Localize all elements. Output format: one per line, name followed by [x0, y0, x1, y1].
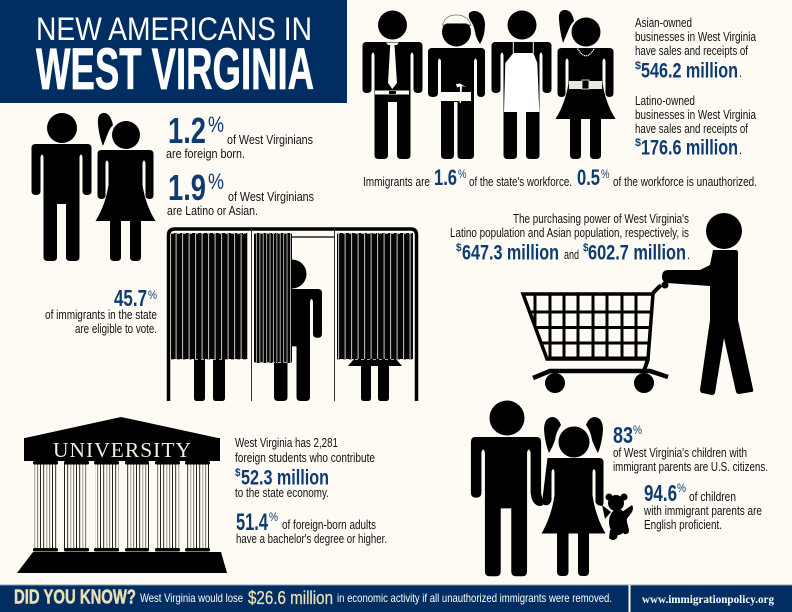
icon: man with apron — [492, 10, 552, 159]
text: Asian-owned businesses: . — [739, 66, 742, 80]
footer bar: did you know: $26.6 million — [248, 588, 333, 608]
text: purchasing power: 602.7 million — [588, 242, 686, 264]
text: workforce shares: 0.5 — [577, 165, 600, 190]
text: English proficient: of children — [689, 490, 736, 504]
icon: university building — [17, 417, 227, 573]
text: Asian-owned businesses: businesses in West Virginia — [635, 30, 756, 44]
text: bachelor's degree: 51.4 — [236, 509, 268, 536]
stat: Latino or Asian: are Latino or Asian. — [167, 204, 258, 218]
text: English proficient: with immigrant parents are — [643, 504, 762, 518]
columns — [33, 461, 210, 552]
text: foreign students: $ — [235, 467, 240, 479]
text: children citizens: of West Virginia's children with — [613, 446, 747, 460]
text: Latino-owned businesses: have sales and receipts of — [635, 122, 748, 136]
text: purchasing power: and — [564, 248, 579, 262]
text: eligible to vote: % — [148, 288, 157, 302]
text: bachelor's degree: of foreign-born adults — [282, 518, 376, 532]
stat: Latino or Asian: 1.9 — [168, 167, 206, 208]
footer bar: did you know: in economic activity if all unauthorized immigrants were removed. — [337, 591, 612, 605]
text: English proficient — [643, 480, 762, 532]
text: workforce shares: Immigrants are — [363, 175, 430, 189]
text: children citizens — [613, 422, 768, 474]
text: workforce shares — [363, 165, 757, 190]
text: Latino-owned businesses: . — [739, 143, 742, 157]
footer bar: did you know: www.immigrationpolicy.org — [642, 594, 774, 606]
icon: man and woman — [32, 113, 156, 261]
text: foreign students — [235, 436, 375, 500]
text: English proficient: English proficient. — [644, 518, 722, 532]
person in the middle booth — [262, 260, 322, 401]
icon: woman with necklace and belt — [556, 10, 616, 159]
title banner: NEW AMERICANS IN — [36, 11, 312, 47]
legs and skirt under the right curtain — [348, 359, 402, 401]
stat: foreign born — [166, 110, 313, 161]
title banner: WEST VIRGINIA — [36, 37, 314, 102]
text: purchasing power: . — [687, 248, 690, 262]
icon: parent and child with teddy bear — [471, 400, 633, 576]
text: workforce shares: % — [601, 167, 610, 181]
text: purchasing power: The purchasing power of West Virginia's — [513, 212, 689, 226]
legs under the left curtain — [194, 355, 225, 401]
stat: Latino or Asian: % — [208, 169, 224, 194]
text: purchasing power: 647.3 million — [462, 242, 559, 264]
footer bar: did you know: West Virginia would lose — [140, 591, 243, 605]
text: eligible to vote: 45.7 — [114, 285, 147, 311]
text: bachelor's degree: have a bachelor's degree or higher. — [236, 532, 387, 546]
text: eligible to vote: of immigrants in the state — [45, 308, 157, 322]
text: foreign students: foreign students who contribute — [235, 451, 375, 465]
text: English proficient: 94.6 — [644, 480, 677, 506]
icon: hammer — [456, 84, 466, 103]
curtain right — [337, 233, 413, 359]
shopper — [662, 213, 753, 395]
text: Latino-owned businesses: $ — [635, 137, 641, 149]
footer bar: did you know — [0, 584, 792, 612]
text: English proficient: % — [677, 481, 686, 495]
stat: foreign born: % — [208, 112, 224, 137]
stat: foreign born: 1.2 — [168, 110, 206, 151]
text: children citizens: 83 — [613, 422, 633, 448]
text: bachelor's degree: % — [269, 510, 278, 524]
icon: worker with hard hat — [428, 11, 485, 159]
title banner — [0, 0, 347, 103]
icon: businessman with tie — [362, 10, 422, 159]
text: workforce shares: 1.6 — [434, 165, 457, 190]
stat: Latino or Asian: of West Virginians — [228, 190, 314, 204]
text: workforce shares: % — [458, 167, 467, 181]
curtain middle — [254, 233, 292, 363]
teddy bear — [602, 494, 633, 540]
text: Asian-owned businesses: 546.2 million — [641, 60, 738, 82]
text: Asian-owned businesses: $ — [635, 60, 641, 72]
text: purchasing power: $ — [583, 242, 588, 254]
text: purchasing power — [450, 212, 690, 264]
text: purchasing power: $ — [456, 242, 462, 254]
text: eligible to vote — [45, 285, 157, 336]
text: Asian-owned businesses: have sales and receipts of — [635, 44, 748, 58]
text: workforce shares: of the state's workforce. — [469, 175, 572, 189]
stat: foreign born: of West Virginians — [227, 133, 313, 147]
icon: university building: UNIVERSITY — [53, 438, 192, 462]
icon: shopper with cart — [523, 213, 753, 395]
text: Asian-owned businesses: Asian-owned — [635, 16, 692, 30]
footer bar: did you know: DID YOU KNOW? — [14, 586, 136, 608]
text: workforce shares: of the workforce is unauthorized. — [613, 175, 757, 189]
curtain left — [171, 233, 248, 359]
icon: voting booths — [168, 229, 416, 401]
text: foreign students: 52.3 million — [241, 466, 329, 490]
shopping cart — [523, 282, 668, 393]
text: foreign students: to the state economy. — [235, 486, 329, 500]
text: purchasing power: Latino population and Asian population, respectively, is — [450, 226, 689, 240]
text: Latino-owned businesses: businesses in West Virginia — [635, 108, 756, 122]
text: foreign students: West Virginia has 2,281 — [235, 436, 338, 450]
stat: foreign born: are foreign born. — [166, 147, 245, 161]
text: Latino-owned businesses: Latino-owned — [635, 94, 695, 108]
text: Asian-owned businesses — [635, 16, 756, 82]
stat: Latino or Asian — [167, 167, 314, 218]
parent — [471, 400, 543, 576]
text: Latino-owned businesses — [635, 94, 756, 160]
text: eligible to vote: are eligible to vote. — [75, 322, 157, 336]
text: bachelor's degree — [236, 509, 387, 546]
text: Latino-owned businesses: 176.6 million — [641, 136, 738, 160]
child — [542, 417, 606, 576]
text: children citizens: % — [633, 423, 642, 437]
